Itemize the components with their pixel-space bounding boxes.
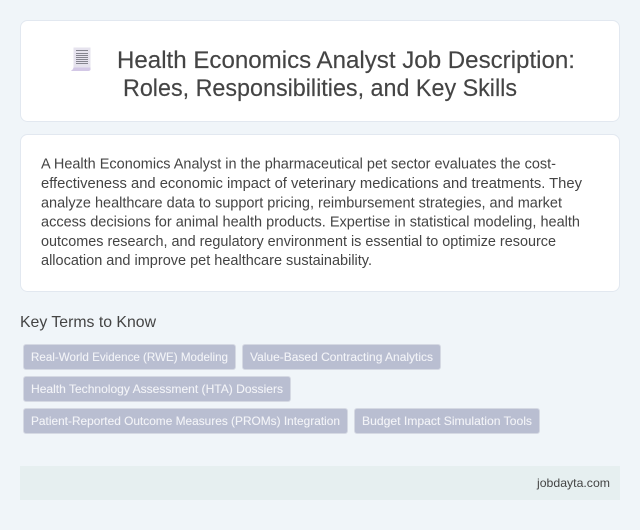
text block: description: [41, 156, 583, 269]
tag: real-world evidence: [24, 344, 236, 370]
tag: value-based contracting: Value-Based Contracting Analytics: [250, 350, 433, 364]
icon: document scroll: [71, 48, 90, 71]
tag group: key terms: [24, 344, 540, 434]
text block: description: analyze healthcare data to support pricing, reimbursement strategies, and market: [41, 196, 562, 212]
tag: patient-reported outcomes: Patient-Reported Outcome Measures (PROMs) Integration: [31, 414, 340, 428]
title: Roles, Responsibilities, and Key Skills: [123, 75, 517, 102]
tag: budget impact: [354, 408, 540, 434]
panel: description card: [20, 134, 620, 292]
footer credit: jobdayta.com: [536, 476, 610, 490]
tag: budget impact: Budget Impact Simulation Tools: [362, 414, 532, 428]
tag: health technology assessment: [24, 376, 290, 402]
tag: patient-reported outcomes: [24, 408, 348, 434]
heading: key terms: Key Terms to Know: [20, 314, 156, 331]
footer bar: [20, 466, 620, 500]
title: [117, 47, 575, 102]
tag: real-world evidence: Real-World Evidence (RWE) Modeling: [31, 350, 228, 364]
title: Health Economics Analyst Job Description:: [117, 47, 575, 74]
text block: description: access decisions for animal health products. Expertise in statistical modeling, health: [41, 214, 580, 230]
text block: description: A Health Economics Analyst in the pharmaceutical pet sector evaluates the cost-: [41, 156, 556, 172]
tag: value-based contracting: [242, 344, 440, 370]
text block: description: outcomes research, and regulatory environment is essential to optimize resource: [41, 234, 556, 250]
text block: description: allocation and improve pet healthcare sustainability.: [41, 253, 372, 269]
panel: header card: [20, 20, 620, 122]
text block: description: effectiveness and economic impact of veterinary medications and treatments. They: [41, 176, 583, 192]
tag: health technology assessment: Health Technology Assessment (HTA) Dossiers: [31, 382, 283, 396]
